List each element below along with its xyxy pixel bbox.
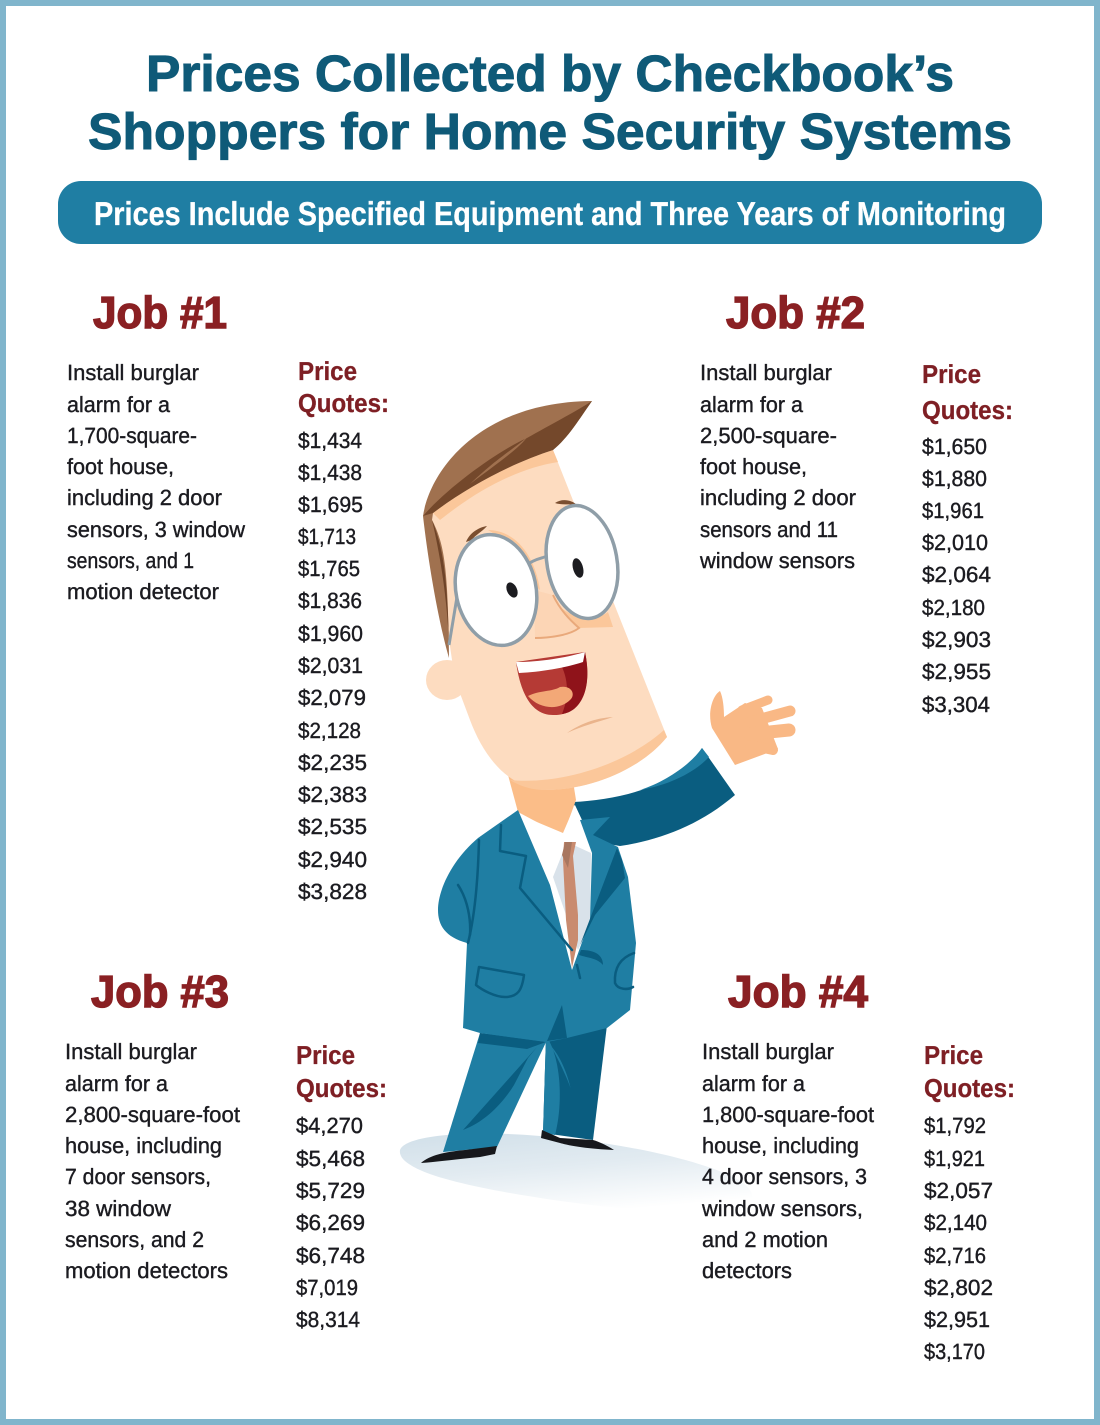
job 2 description: 2,500-square-	[700, 423, 837, 448]
ear	[426, 660, 468, 700]
job 1 price quotes: $1,836	[298, 588, 362, 613]
job 1 price quotes: Price	[298, 356, 357, 386]
job 2 panel	[699, 287, 1013, 717]
job 4 price quotes: Quotes:	[924, 1073, 1015, 1103]
job 2 description	[699, 360, 856, 573]
title: Shoppers for Home Security Systems	[88, 103, 1012, 160]
job 2 price quotes	[922, 359, 1013, 717]
job 2 description: including 2 door	[700, 485, 856, 510]
job 2 price quotes: $1,880	[922, 466, 987, 491]
job 1 description	[67, 360, 245, 604]
job 3 price quotes: Price	[296, 1040, 355, 1070]
job 4 description	[701, 1039, 874, 1283]
job 4 price quotes: Price	[924, 1040, 983, 1070]
job 2 description: alarm for a	[700, 392, 804, 417]
job 4 price quotes	[924, 1040, 1015, 1364]
job 4 description: window sensors,	[701, 1196, 863, 1221]
job 1 price quotes: $3,828	[298, 879, 367, 904]
job 3 description: Install burglar	[65, 1039, 197, 1064]
job 2 price quotes: $2,010	[922, 530, 988, 555]
mouth	[516, 652, 587, 715]
job 1 description: alarm for a	[67, 392, 171, 417]
job 3 price quotes: $5,729	[296, 1178, 365, 1203]
job 3 price quotes: Quotes:	[296, 1073, 387, 1103]
job 2 heading: Job #2	[726, 287, 865, 338]
job 1 price quotes: $2,535	[298, 814, 367, 839]
job 3 description: 38 window	[65, 1196, 171, 1221]
job 1 description: foot house,	[67, 454, 174, 479]
job 4 description: house, including	[702, 1133, 859, 1158]
job 3 price quotes: $7,019	[296, 1275, 358, 1300]
job 2 price quotes: $2,903	[922, 627, 991, 652]
job 1 price quotes: $2,128	[298, 718, 361, 743]
job 4 description: 1,800-square-foot	[702, 1102, 874, 1127]
jacket	[438, 810, 636, 1042]
job 4 price quotes: $2,140	[924, 1210, 987, 1235]
job 3 description: 2,800-square-foot	[65, 1102, 240, 1127]
job 4 description: detectors	[702, 1258, 792, 1283]
job 1 price quotes: $2,079	[298, 685, 366, 710]
eyebrows	[466, 526, 487, 542]
jacket lines	[458, 825, 634, 997]
title	[88, 45, 1012, 160]
job 2 price quotes: Price	[922, 359, 981, 389]
subtitle banner	[58, 181, 1042, 244]
job 3 description: 7 door sensors,	[65, 1164, 211, 1189]
job 4 price quotes: $1,921	[924, 1146, 985, 1171]
job 3 price quotes: $6,269	[296, 1210, 365, 1235]
job 3 price quotes: $8,314	[296, 1307, 360, 1332]
job 2 description: Install burglar	[700, 360, 832, 385]
job 1 description: motion detector	[67, 579, 219, 604]
necktie	[563, 842, 578, 968]
job 3 panel	[65, 966, 387, 1332]
shoes	[421, 1130, 614, 1163]
job 1 price quotes: $1,695	[298, 492, 363, 517]
job 3 description: sensors, and 2	[65, 1227, 204, 1252]
nose	[534, 590, 579, 638]
job 4 description: and 2 motion	[702, 1227, 828, 1252]
job 2 description: window sensors	[699, 548, 855, 573]
job 1 heading: Job #1	[93, 287, 227, 338]
job 4 description: Install burglar	[702, 1039, 834, 1064]
job 1 panel	[67, 287, 389, 904]
job 3 price quotes: $5,468	[296, 1146, 365, 1171]
job 3 description: motion detectors	[65, 1258, 228, 1283]
job 1 price quotes	[298, 356, 389, 904]
job 1 description: 1,700-square-	[67, 423, 197, 448]
job 2 price quotes: $3,304	[922, 692, 990, 717]
raised arm	[573, 748, 735, 846]
job 1 price quotes: $1,960	[298, 621, 363, 646]
job 4 price quotes: $2,951	[924, 1307, 990, 1332]
job 1 price quotes: $2,940	[298, 847, 367, 872]
job 4 heading: Job #4	[728, 966, 868, 1017]
job 4 price quotes: $3,170	[924, 1339, 985, 1364]
job 1 price quotes: $1,434	[298, 428, 362, 453]
title: Prices Collected by Checkbook’s	[146, 45, 954, 102]
job 1 description: including 2 door	[67, 485, 222, 510]
shirt	[520, 805, 592, 975]
glasses	[445, 500, 626, 653]
job 3 price quotes: $6,748	[296, 1243, 365, 1268]
job 4 price quotes: $2,716	[924, 1243, 986, 1268]
job 2 price quotes: $2,180	[922, 595, 985, 620]
job 3 heading: Job #3	[91, 966, 229, 1017]
job 2 description: sensors and 11	[700, 517, 838, 542]
job 3 description: house, including	[65, 1133, 222, 1158]
job 4 description: 4 door sensors, 3	[702, 1164, 867, 1189]
legs	[443, 1025, 607, 1152]
job 4 price quotes: $2,802	[924, 1275, 993, 1300]
pupils	[504, 557, 585, 599]
job 1 price quotes: Quotes:	[298, 388, 389, 418]
job 1 description: sensors, 3 window	[67, 517, 245, 542]
job 1 description: Install burglar	[67, 360, 199, 385]
job 1 price quotes: $2,235	[298, 750, 367, 775]
job 2 description: foot house,	[700, 454, 807, 479]
job 2 price quotes: $1,650	[922, 434, 987, 459]
illustration: businessman	[400, 401, 790, 1211]
job 3 price quotes	[296, 1040, 387, 1332]
job 2 price quotes: $2,955	[922, 659, 991, 684]
chin crease	[567, 717, 613, 733]
hair	[423, 401, 592, 658]
job 4 price quotes: $1,792	[924, 1113, 986, 1138]
job 2 price quotes: $1,961	[922, 498, 984, 523]
ground shadow	[400, 1134, 752, 1211]
job 1 description: sensors, and 1	[67, 548, 194, 573]
face shadows	[510, 730, 667, 790]
job 2 price quotes: Quotes:	[922, 395, 1013, 425]
job 3 description: alarm for a	[65, 1071, 169, 1096]
job 4 price quotes: $2,057	[924, 1178, 993, 1203]
job 3 description	[65, 1039, 240, 1283]
job 4 description: alarm for a	[702, 1071, 806, 1096]
face	[430, 435, 667, 790]
job 1 price quotes: $1,713	[298, 524, 356, 549]
job 1 price quotes: $1,438	[298, 460, 362, 485]
hand	[710, 691, 790, 765]
job 3 price quotes: $4,270	[296, 1113, 363, 1138]
neck	[508, 775, 576, 836]
job 2 price quotes: $2,064	[922, 562, 991, 587]
job 1 price quotes: $2,031	[298, 653, 363, 678]
job 1 price quotes: $1,765	[298, 556, 360, 581]
job 4 panel	[701, 966, 1015, 1364]
job 1 price quotes: $2,383	[298, 782, 367, 807]
